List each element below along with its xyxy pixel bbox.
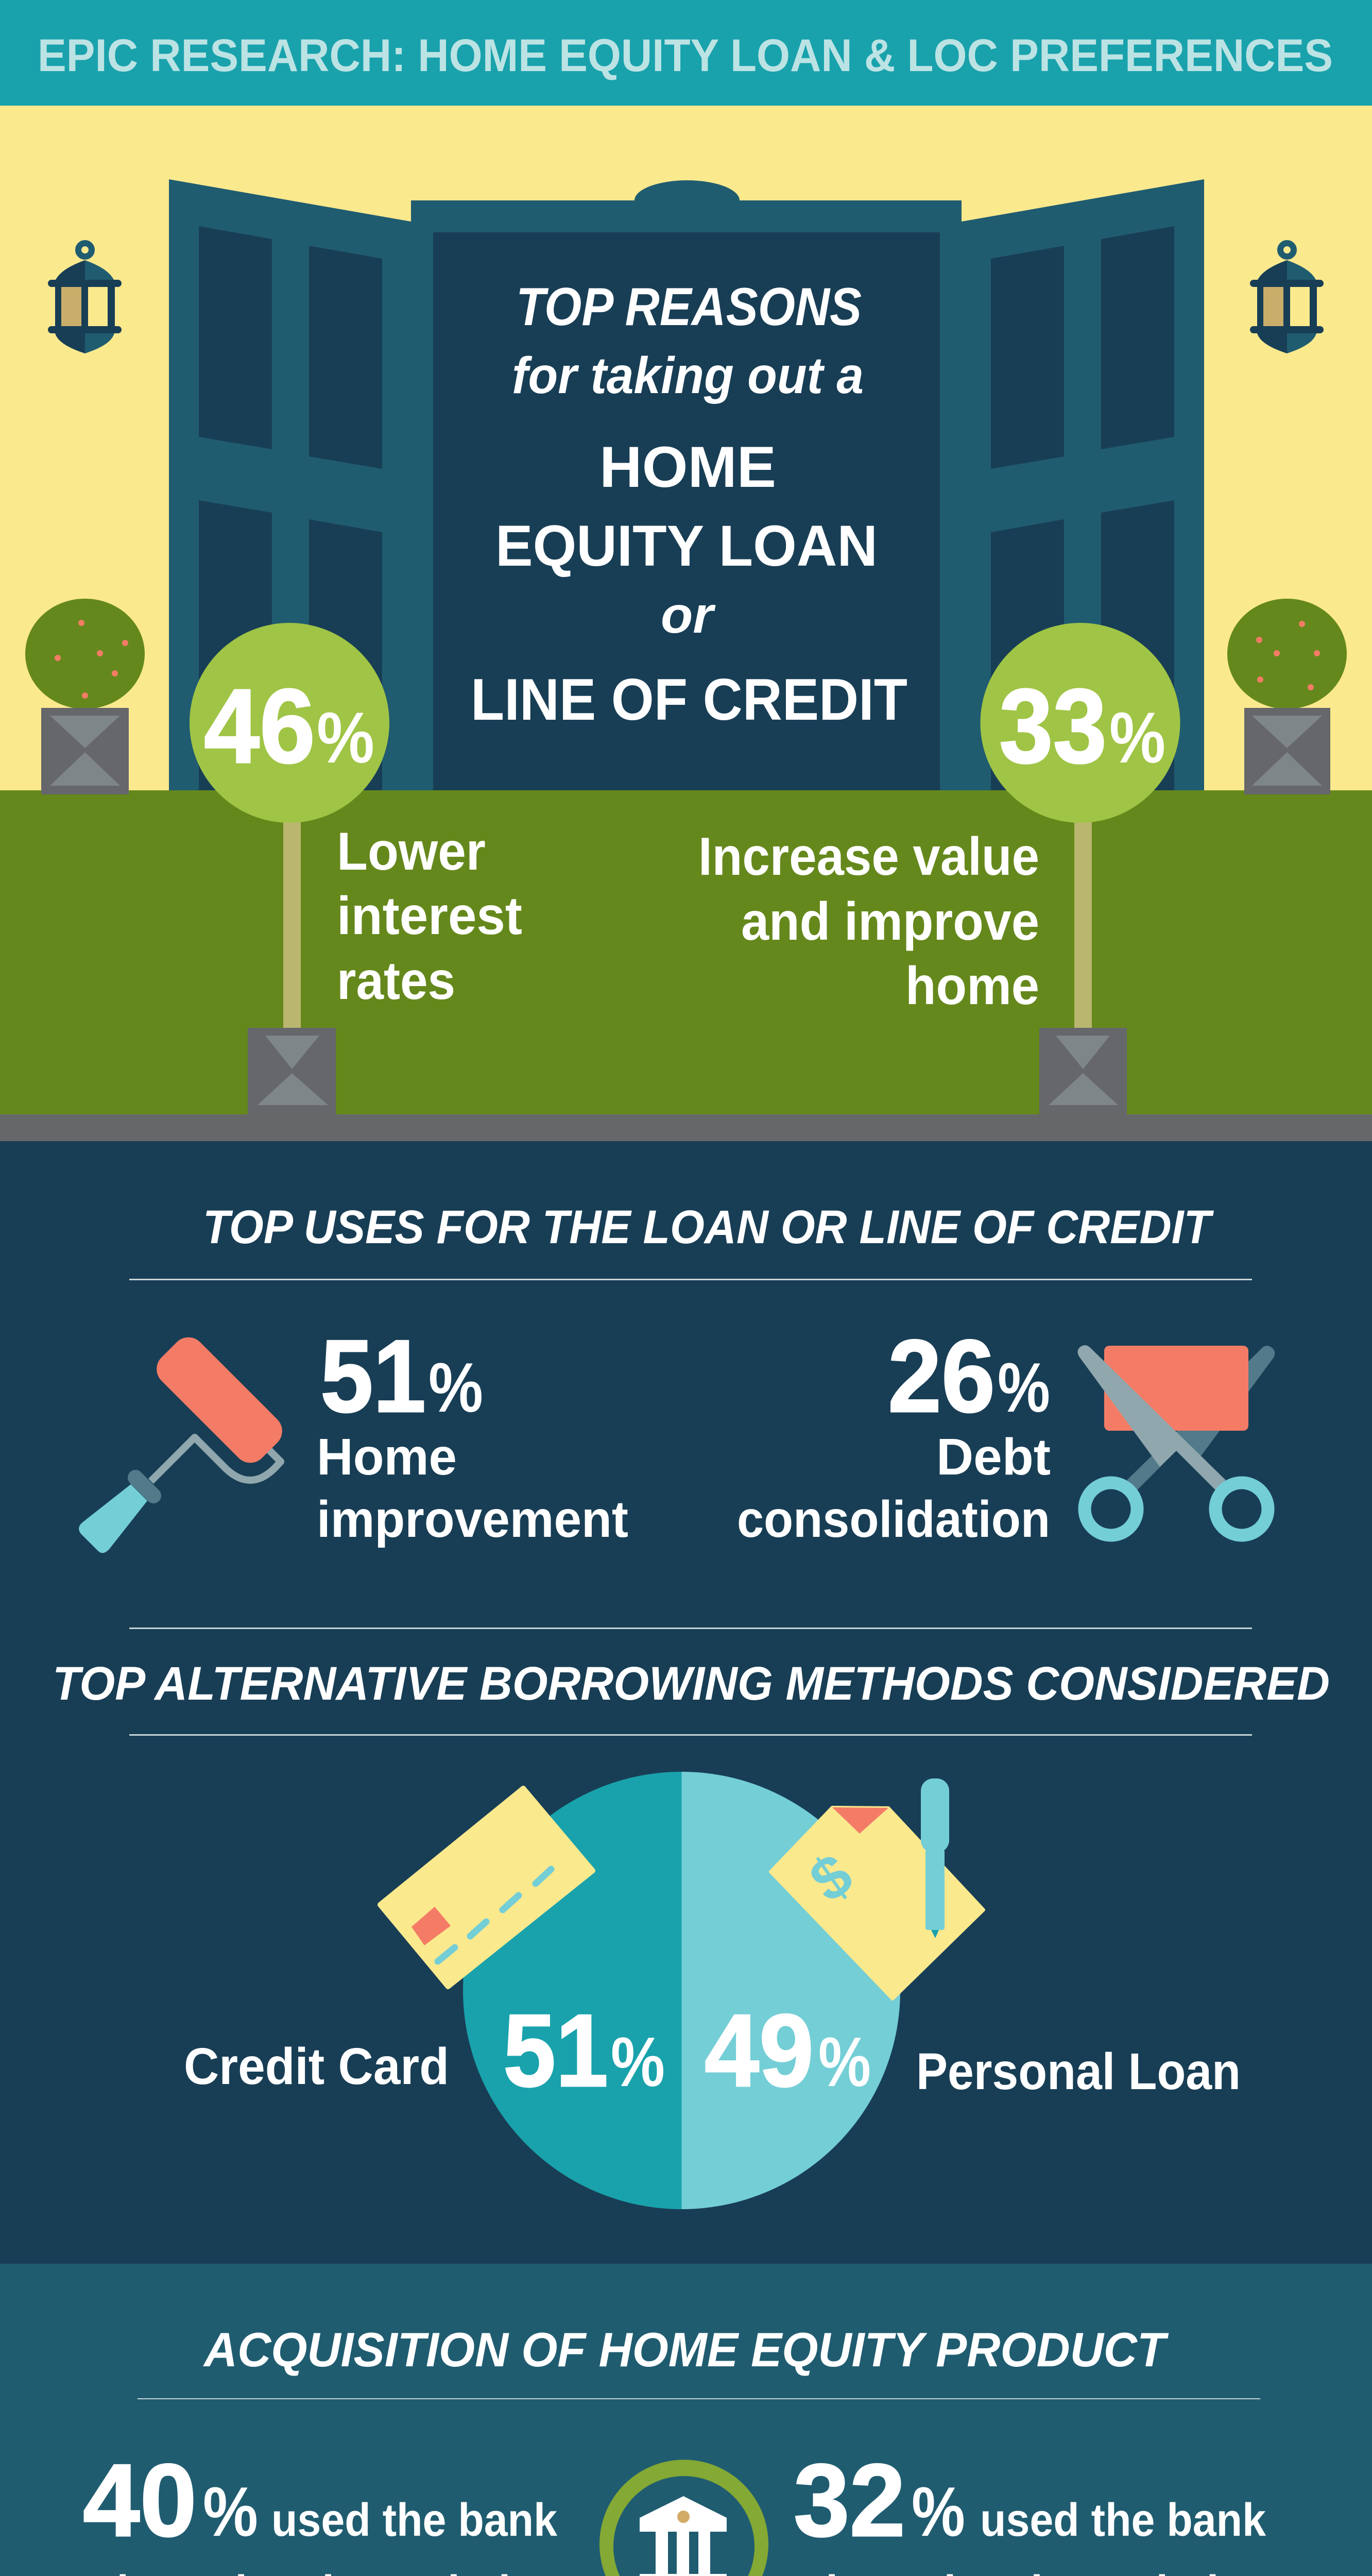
door title text: LINE OF CREDIT xyxy=(471,667,907,733)
stat: 40% mortgage: used the bank xyxy=(271,2495,558,2546)
icon: credit card xyxy=(380,1788,593,1987)
icon: scissors cutting paper xyxy=(1077,1345,1275,1535)
stat: 32% checking account xyxy=(792,2443,1323,2576)
stat: 51% home improvement: % xyxy=(428,1348,483,1427)
icon: right lantern xyxy=(1250,243,1324,353)
stat: 33% increase value tree: 33 xyxy=(999,667,1107,785)
label: credit card: Credit Card xyxy=(184,2038,449,2095)
stat: 46% lower interest rates tree: rates xyxy=(337,951,455,1011)
chart: borrowing methods pie: % xyxy=(611,2023,665,2101)
panel: lawn xyxy=(0,790,1372,1114)
icon: loan document and pen: $ xyxy=(798,1840,865,1916)
icon: loan document and pen xyxy=(770,1778,984,1999)
panel: pavement xyxy=(0,1114,1372,1141)
heading: alternative borrowing methods: TOP ALTERNATIVE BORROWING METHODS CONSIDERED xyxy=(53,1657,1330,1710)
header banner xyxy=(0,0,1372,106)
door title text: EQUITY LOAN xyxy=(495,514,878,578)
stat: 32% checking account: % xyxy=(912,2472,965,2551)
panel: house front background xyxy=(0,106,1372,791)
door title text: for taking out a xyxy=(512,347,864,404)
stat: 33% increase value tree: % xyxy=(1109,697,1165,778)
stat: 51% home improvement xyxy=(317,1319,628,1548)
panel: dark uses and alternatives section xyxy=(0,1141,1372,2264)
stat: 51% home improvement: improvement xyxy=(317,1490,628,1548)
stat: 33% increase value tree xyxy=(698,623,1180,1114)
chart: borrowing methods pie: 49 xyxy=(705,1993,814,2108)
stat: 40% mortgage: % xyxy=(203,2472,258,2551)
stat: 33% increase value tree: and improve xyxy=(741,892,1039,952)
stat: 40% mortgage xyxy=(82,2443,558,2576)
stat: 46% lower interest rates tree: 46 xyxy=(204,667,315,785)
stat: 26% debt consolidation: Debt xyxy=(936,1428,1051,1486)
stat: 46% lower interest rates tree xyxy=(190,623,522,1114)
stat: 46% lower interest rates tree: interest xyxy=(337,886,522,946)
icon: paint roller xyxy=(79,1330,289,1553)
stat: 26% debt consolidation: % xyxy=(998,1348,1050,1427)
chart: borrowing methods pie: 51 xyxy=(503,1993,608,2108)
icon: left lantern xyxy=(48,243,122,353)
stat: 51% home improvement: Home xyxy=(317,1428,457,1486)
chart: borrowing methods pie: % xyxy=(818,2023,871,2101)
illustration: house doorway with shutters xyxy=(169,179,1204,790)
stat: 46% lower interest rates tree: Lower xyxy=(337,822,486,882)
icon: bank location pin xyxy=(599,2460,768,2576)
heading: alternative borrowing methods xyxy=(53,1628,1330,1736)
chart: borrowing methods pie xyxy=(463,1772,900,2209)
stat: 26% debt consolidation xyxy=(737,1319,1051,1548)
door title text: TOP REASONS xyxy=(516,277,862,337)
heading: acquisition: ACQUISITION OF HOME EQUITY PRODUCT xyxy=(203,2323,1169,2377)
heading: top uses: TOP USES FOR THE LOAN OR LINE OF CREDIT xyxy=(203,1201,1214,1253)
stat: 51% home improvement: 51 xyxy=(320,1319,426,1434)
stat: 33% increase value tree: Increase value xyxy=(698,827,1039,887)
icon: left potted bush xyxy=(25,599,145,794)
stat: 32% checking account: 32 xyxy=(794,2443,905,2558)
heading: top uses xyxy=(129,1201,1252,1280)
door title text xyxy=(471,277,907,733)
stat: 33% increase value tree: home xyxy=(905,956,1039,1016)
door title text: or xyxy=(661,586,716,644)
door title text: HOME xyxy=(599,435,776,499)
stat: 46% lower interest rates tree: % xyxy=(317,697,374,778)
stat: 40% mortgage: 40 xyxy=(83,2443,197,2558)
stat: 26% debt consolidation: consolidation xyxy=(737,1490,1050,1548)
label: personal loan: Personal Loan xyxy=(916,2043,1241,2100)
panel: acquisition section xyxy=(0,2264,1372,2576)
stat: 26% debt consolidation: 26 xyxy=(888,1319,995,1434)
stat: 32% checking account: used the bank xyxy=(980,2495,1266,2546)
icon: right potted bush xyxy=(1227,599,1347,794)
